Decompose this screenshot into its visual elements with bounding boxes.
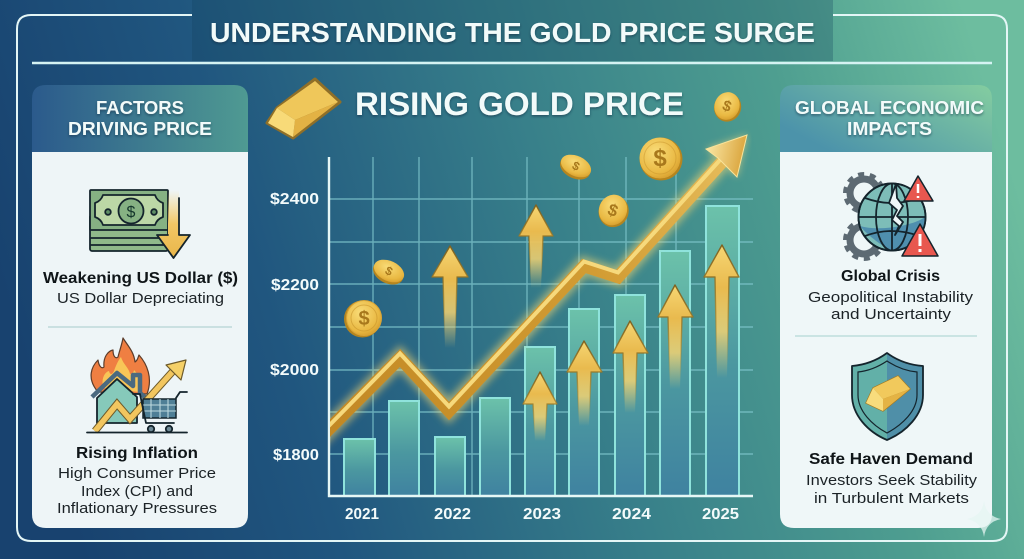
y axis labels: $1800 — [273, 447, 319, 464]
bars — [344, 206, 739, 496]
text: safe haven — [806, 451, 978, 507]
panel heading: factors: FACTORS — [96, 98, 184, 118]
panel heading: impacts: IMPACTS — [847, 119, 932, 139]
text: weakening dollar: Weakening US Dollar ($) — [43, 270, 238, 287]
text: safe haven: Investors Seek Stability — [806, 472, 978, 489]
sparkle — [967, 501, 1001, 537]
icon: shield with gold bar — [852, 353, 923, 440]
floating coins — [344, 89, 745, 337]
x axis labels: 2021 — [345, 506, 379, 523]
floating coins: $ — [570, 158, 582, 174]
x axis labels: 2024 — [612, 506, 651, 523]
icon: falling dollar: $ — [127, 204, 136, 221]
floating coins: $ — [383, 263, 395, 279]
text: global crisis — [808, 268, 974, 323]
panel heading: factors — [68, 98, 212, 139]
text: rising inflation: Index (CPI) and — [81, 483, 193, 500]
panel heading: factors: DRIVING PRICE — [68, 119, 212, 139]
text: rising inflation: High Consumer Price — [58, 465, 216, 482]
title banner: UNDERSTANDING THE GOLD PRICE SURGE — [210, 17, 815, 48]
floating coins: $ — [605, 200, 621, 221]
text: global crisis: and Uncertainty — [831, 306, 952, 323]
y axis labels: $2400 — [270, 191, 319, 208]
text: safe haven: Safe Haven Demand — [809, 451, 973, 468]
text: rising inflation: Inflationary Pressures — [57, 500, 217, 517]
icon: falling dollar — [90, 190, 190, 258]
panel: factors driving price — [32, 85, 248, 528]
text: global crisis: Geopolitical Instability — [808, 289, 974, 306]
text: global crisis: Global Crisis — [841, 268, 940, 285]
chart heading: RISING GOLD PRICE — [355, 86, 684, 122]
panel heading: impacts: GLOBAL ECONOMIC — [795, 98, 984, 118]
icon: global crisis — [846, 174, 938, 258]
floating coins: $ — [720, 97, 734, 116]
x axis labels: 2022 — [434, 506, 471, 523]
x axis labels: 2025 — [702, 506, 739, 523]
panel heading: impacts — [795, 98, 984, 139]
floating coins: $ — [653, 145, 667, 172]
icon: gold bar — [267, 79, 340, 138]
chart: gold price — [270, 89, 753, 523]
text: rising inflation: Rising Inflation — [76, 445, 198, 462]
y axis labels: $2000 — [270, 362, 319, 379]
icon: rising inflation — [87, 338, 187, 432]
text: rising inflation — [57, 445, 217, 517]
trend line arrow — [310, 135, 747, 448]
y axis labels — [270, 191, 319, 464]
text: weakening dollar: US Dollar Depreciating — [57, 290, 224, 307]
title banner — [192, 0, 833, 61]
text: weakening dollar — [43, 270, 238, 307]
x axis labels: 2023 — [523, 506, 561, 523]
y axis labels: $2200 — [271, 277, 319, 294]
panel: global economic impacts — [780, 85, 992, 528]
text: safe haven: in Turbulent Markets — [814, 490, 969, 507]
upward arrows — [432, 205, 739, 441]
floating coins: $ — [358, 308, 370, 330]
axes — [329, 157, 753, 496]
x axis labels — [345, 506, 739, 523]
